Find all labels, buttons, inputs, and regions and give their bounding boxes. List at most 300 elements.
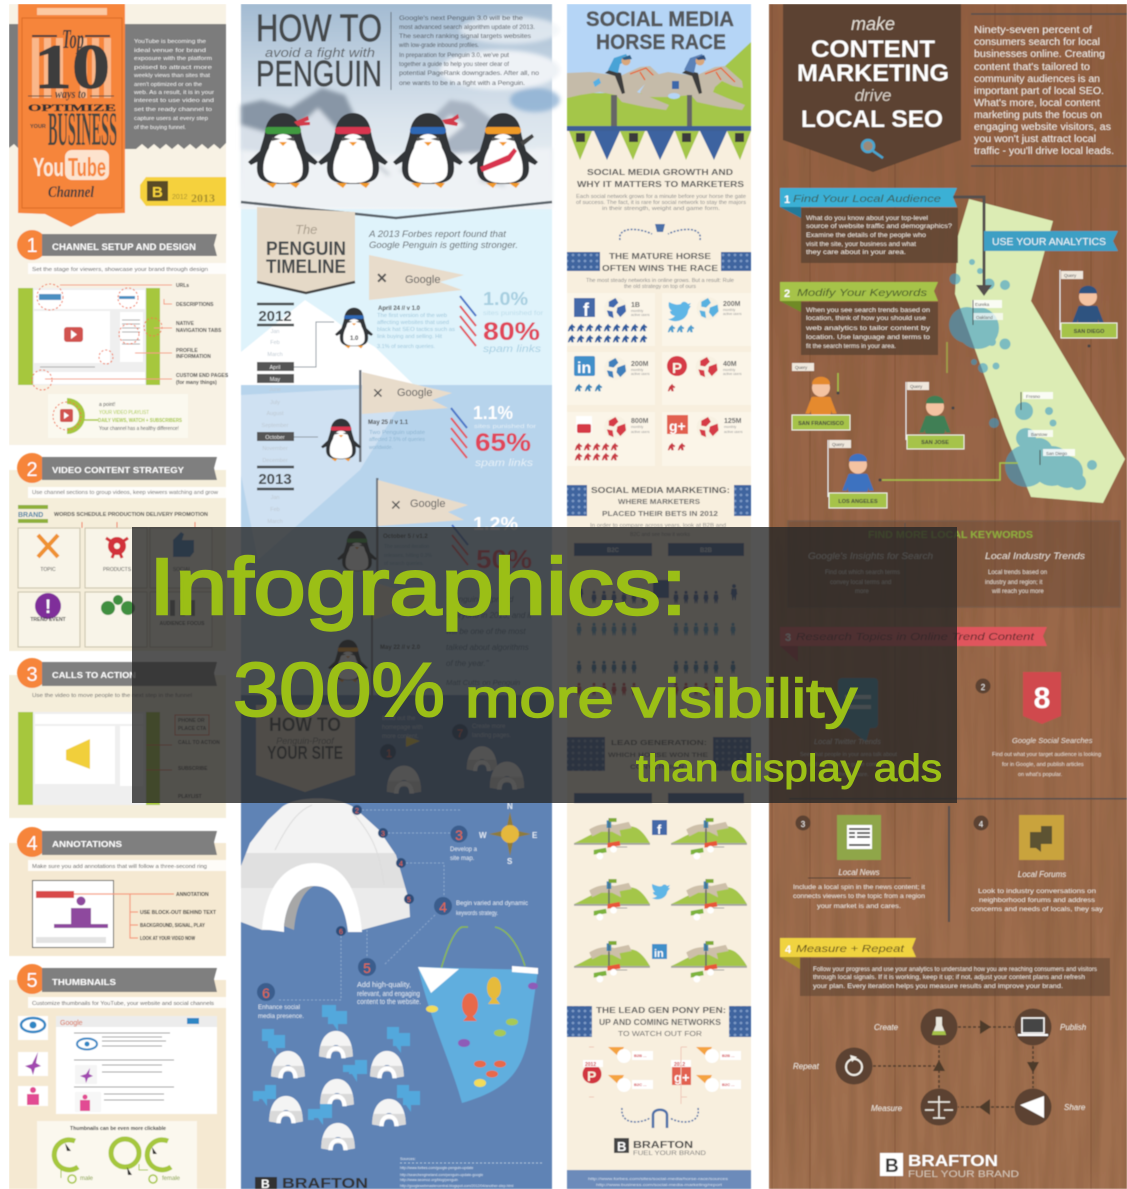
step 6 social igloo network: 6 [262, 985, 270, 1001]
update 4: May 22 v2.0: Matt Cutts on Penguin [446, 678, 520, 687]
orange title banner: ways to [55, 86, 86, 101]
step 4 local forums: Local Forums [1018, 870, 1066, 879]
card: LinkedIn: monthly [631, 368, 644, 372]
step 3 compass: S [507, 857, 513, 866]
wireframe labels: PLACE CTA [178, 726, 207, 732]
intro paragraph: content that's tailored to [974, 62, 1090, 73]
step 3 compass: N [507, 802, 513, 811]
icon: LinkedIn small [652, 944, 667, 960]
header body text: web. As a result, it is in your [133, 90, 214, 96]
orange title banner: OPTIMIZE [28, 103, 116, 113]
source cards: and use topics to guide content [808, 762, 885, 768]
number badge 3: 3 [26, 664, 38, 686]
cycle: share: Share [1064, 1103, 1086, 1112]
wireframe labels: PLAYLIST [178, 794, 202, 800]
how to penguin-proof banner [256, 705, 355, 792]
B2C vs B2B bars and people rows [574, 543, 744, 696]
map labels: San Diego [1046, 451, 1068, 456]
section 1: channel setup: Set the stage for viewers, showcase your brand through design [32, 267, 208, 273]
update 1: April 24 v1.0: sites punished for [483, 311, 543, 317]
source cards: See what people in your area talk about [800, 752, 897, 758]
sources and Brafton logo: http://googlewebmastercentral.blogspot.com/2012/04/another-step.html [400, 1184, 514, 1188]
use your analytics ribbon [984, 231, 1118, 251]
card: Google Plus: 125M [724, 418, 742, 425]
wireframe labels: PHONE OR [178, 718, 205, 724]
large igloo [241, 790, 416, 933]
update 2: May 25 v1.1: Google [397, 387, 432, 399]
icon: Twitter small [652, 884, 670, 899]
number badge 1 [17, 230, 47, 260]
step 3 compass: Develop a [450, 847, 478, 853]
character: Northern Nevada: SAN DIEGO [1074, 329, 1105, 335]
card: Google Plus: g+ [669, 418, 686, 434]
update 1: April 24 v1.0: 1.0 [350, 336, 359, 342]
step 4 keyword bucket [418, 897, 538, 1103]
step 5 quality content: content to the website. [357, 999, 421, 1006]
source cards: on what's popular. [1018, 772, 1063, 778]
step 3 compass [450, 802, 538, 866]
strategy icon cards [18, 528, 212, 647]
timeline years and months [257, 304, 334, 525]
step 4 keyword bucket: keywords strategy. [456, 910, 498, 917]
yellow Brafton tag: 2013 [191, 191, 215, 205]
update 3: October v1.2: ✕ [390, 497, 402, 513]
section 2: video content strategy: BRAND [18, 512, 43, 519]
steps under the overlay: 7 [457, 728, 463, 740]
character: Los Angeles [828, 440, 1018, 508]
timeline wooden banner: The [295, 222, 317, 237]
annotation labels: ANNOTATION [176, 892, 209, 898]
step 2 modify your keywords: location, think of how you should use [806, 315, 926, 322]
update 1: April 24 v1.0: spam links [483, 344, 541, 355]
section 2: video content strategy: WORDS SCHEDULE PRODUCTION DELIVERY PROMOTION [54, 512, 208, 518]
update 2: May 25 v1.1: May 25 // v 1.1 [368, 420, 409, 426]
card: Twitter: monthly [723, 308, 736, 312]
section 3: calls to action [17, 658, 220, 805]
panel: Social media horse race: Each social network grows for a minute before your horse the gate [576, 194, 746, 200]
chevron divider [241, 202, 552, 218]
update 4: May 22 v2.0 [328, 580, 532, 700]
timeline years and months: 2013 [258, 471, 292, 488]
Pinterest and Google+ pens: B2B ... [634, 1053, 646, 1058]
annotation labels: BACKGROUND, SIGNAL, PLAY [140, 923, 206, 929]
step 1 find your local audience: they care about in your area. [806, 249, 906, 256]
dark title banner: make [851, 14, 895, 34]
wireframe labels: INFORMATION [176, 354, 211, 360]
measurement cycle diagram [793, 1008, 1087, 1126]
lead gen pony pen heading: THE LEAD GEN PONY PEN: [596, 1005, 726, 1015]
header body text: aren't optimized or on the [134, 82, 202, 88]
card: YouTube: 800M [631, 418, 649, 425]
step 6 social igloo network [253, 983, 420, 1150]
number badge 2 [976, 678, 990, 694]
update 2: May 25 v1.1: affected 2.5% of queries [369, 437, 426, 443]
update 3: October v1.2: of search queries. [384, 561, 424, 567]
icon: magnifier [862, 140, 883, 158]
Brafton logo: B [885, 1156, 899, 1177]
thumbnail samples [18, 1016, 48, 1106]
Forbes intro line [368, 229, 518, 250]
timeline years and months: March [267, 519, 283, 525]
lead generation heading [567, 737, 751, 803]
timeline years and months: March [267, 352, 283, 358]
header body text [133, 39, 214, 131]
thumbnail tip box: Thumbnails can be even more clickable [70, 1126, 166, 1132]
Pinterest and Google+ pens: P [587, 1068, 596, 1084]
annotation labels [140, 892, 216, 942]
section 4: annotations [17, 827, 226, 948]
thumbnail tip box: female [162, 1176, 181, 1182]
step 4 local forums: Look to industry conversations on [978, 888, 1097, 895]
card: YouTube [575, 416, 650, 460]
timeline years and months: April [269, 365, 281, 371]
cycle arrows [873, 1027, 1033, 1107]
wireframe labels: PROFILE [176, 348, 198, 354]
intro paragraph: Ninety-seven percent of [974, 25, 1092, 36]
update 4: May 22 v2.0: "Penguin surprised [446, 595, 514, 604]
cycle: share [1014, 1088, 1086, 1126]
section 2: video content strategy: Use channel sections to group videos, keep viewers watching and grow [32, 490, 218, 496]
Brafton logo: BRAFTON [633, 1139, 693, 1151]
header body text: ideal venue for brand [134, 48, 206, 54]
orange title banner: Tube [68, 152, 106, 182]
step 2 modify your keywords: location. Use language and terms to [806, 334, 930, 341]
green ring tip: Your channel has a healthy difference! [99, 426, 179, 432]
timeline wooden banner [257, 207, 355, 293]
card: Pinterest: monthly [723, 368, 736, 372]
panel: How to avoid a fight with Penguin [241, 4, 560, 1189]
title: PENGUIN [256, 53, 382, 94]
yellow Brafton tag [140, 177, 226, 206]
dark title banner: MARKETING [797, 60, 949, 87]
step 1 find your local audience: source of website traffic and demographics? [806, 223, 952, 230]
icon: Google Trends: 8 [1034, 682, 1050, 715]
step 3 research trending content: Research Topics in Online Trend Content [796, 631, 1035, 643]
update 1: April 24 v1.0: 1.0% [483, 289, 528, 309]
section heading mature horse: the old strategy on top of ours [624, 284, 697, 290]
wireframe labels [175, 715, 220, 800]
wireframe labels: CUSTOM END PAGES [176, 373, 229, 379]
Pinterest and Google+ pens: 2012 [674, 1062, 685, 1068]
timeline wooden banner: TIMELINE [266, 257, 346, 278]
panel: YouTube channel guide: BUSINESS [48, 103, 117, 156]
section heading where marketers placed bets [567, 485, 751, 538]
step 2 modify your keywords: web analytics to tailor content by [805, 325, 931, 332]
timeline years and months: Feb [270, 340, 280, 346]
ribbon heading: ANNOTATIONS [52, 840, 123, 849]
title: SOCIAL MEDIA [586, 8, 734, 31]
timeline years and months: December [262, 458, 288, 464]
update 1: April 24 v1.0: April 24 // v 1.0 [378, 306, 421, 312]
use your analytics ribbon: USE YOUR ANALYTICS [992, 236, 1106, 248]
orange title banner: YOUR [30, 124, 46, 130]
timeline years and months: August [266, 411, 284, 417]
update 3: October v1.2: October 5 / v1.2 [383, 534, 428, 540]
update 2: May 25 v1.1: ✕ [372, 385, 384, 401]
lead generation heading: WHICH HORSE WON THE [608, 752, 709, 759]
orange title banner: Top [62, 24, 84, 54]
map labels: Eureka [975, 302, 990, 307]
wireframe labels: CALL TO ACTION [178, 740, 220, 746]
header body text: YouTube is becoming the [134, 39, 206, 45]
character: Los Angeles: Query [832, 442, 845, 447]
section 2: video content strategy: TREND EVENT [30, 617, 66, 623]
igloo numbered points [336, 805, 414, 936]
source cards: Google Social Searches [1012, 736, 1093, 745]
Forbes intro line: Google Penguin is getting stronger. [369, 240, 518, 250]
header body text: set the ready channel to [134, 107, 212, 113]
update 1: April 24 v1.0: affecting websites that used [377, 320, 449, 326]
Pinterest and Google+ pens: B2C ... [634, 1082, 646, 1087]
yellow Brafton tag: 2012 [172, 194, 188, 201]
B2C vs B2B bars and people rows: B2C [607, 548, 620, 554]
dark title banner: LOCAL SEO [801, 106, 943, 133]
section 5: thumbnails: Customize thumbnails for YouTube, your website and social channels [32, 1001, 214, 1007]
ribbon heading: CHANNEL SETUP AND DESIGN [52, 242, 196, 252]
timeline years and months: October [265, 435, 285, 441]
bunting [567, 126, 751, 160]
how to penguin-proof banner: HOW TO [269, 715, 341, 736]
update 1: April 24 v1.0: 80% [483, 318, 540, 346]
step 5 quality content: Add high-quality, [357, 982, 411, 989]
number badge 1: 1 [26, 235, 38, 257]
orange title banner [18, 4, 125, 227]
icon: green leaves [101, 595, 135, 615]
step 3 local news: connects viewers to the topic from a region [793, 894, 925, 900]
step 3 compass: E [532, 831, 538, 840]
header body text: of the buying funnel. [134, 125, 186, 131]
character: Los Angeles: LOS ANGELES [838, 499, 878, 505]
find more local keywords box: Local Industry Trends [985, 551, 1086, 561]
step 3 local news: Include a local spin in the news content; it [793, 885, 925, 891]
map labels: Oakland [976, 315, 993, 320]
timeline wooden banner: PENGUIN [266, 239, 346, 260]
sources and Brafton logo: http://www.seomoz.org/blog/penguin [400, 1178, 458, 1182]
igloo numbered points: 2 [355, 808, 359, 815]
update 1: April 24 v1.0: The first version of the web [377, 313, 447, 319]
cycle: repeat [793, 1048, 872, 1084]
cycle: publish [1014, 1008, 1087, 1046]
update 4: May 22 v2.0: talked about algorithms [446, 643, 529, 652]
title [586, 8, 734, 54]
dark translucent headline overlay [132, 527, 957, 803]
Forbes intro line: A 2013 Forbes report found that [368, 229, 507, 239]
header body text: exposure with the platform [134, 56, 212, 62]
lead gen pony pen heading: TO WATCH OUT FOR [618, 1029, 703, 1038]
section 2: video content strategy: PRODUCTS [103, 567, 132, 573]
intro text: In preparation for Penguin 3.0, we've put [399, 52, 509, 59]
map labels: Fresno [1026, 394, 1041, 399]
card: Twitter: active users [723, 312, 742, 316]
step 4 local forums: 4 [979, 820, 984, 829]
card: YouTube: monthly [631, 425, 644, 429]
step 4 local forums: concerns and needs of locals, they say [971, 906, 1104, 913]
intro paragraph: you won't just attract local [974, 134, 1096, 145]
intro text: The search ranking signal targets websites [399, 33, 532, 40]
number badge 5 [17, 964, 47, 994]
icon: red gear [106, 537, 128, 558]
Pinterest and Google+ pens: B2C ... [722, 1082, 734, 1087]
wireframe labels: URLs [176, 283, 189, 289]
update 1: April 24 v1.0: link buying and selling. Hit [377, 334, 443, 340]
how to penguin-proof banner: YOUR SITE [267, 743, 343, 763]
thumbnail tip box [37, 1121, 197, 1189]
sources and Brafton logo: http://www.forbes.com/google-penguin-update [400, 1166, 473, 1170]
card: Facebook: f [583, 300, 590, 320]
step 1 find your local audience: Examine the details of the people who [806, 232, 926, 239]
intro paragraph: What's more, local content [974, 98, 1100, 109]
Brafton logo: B [617, 1139, 626, 1154]
section 1: channel setup [17, 230, 229, 438]
step 6 social igloo network: Enhance social [258, 1005, 300, 1011]
steps under the overlay: Create more [472, 724, 506, 730]
update 2: May 25 v1.1: sites punished for [474, 424, 537, 430]
fish [426, 977, 538, 1087]
ribbon heading [42, 234, 217, 256]
update 3: October v1.2 [337, 478, 532, 574]
header body text: poised to attract more [134, 65, 212, 71]
find more local keywords box [788, 521, 1120, 607]
step 3 compass: site map. [450, 856, 475, 862]
find more local keywords box: will reach you more [991, 589, 1044, 595]
intro paragraph: engaging website visitors, as [974, 122, 1111, 133]
section heading growth [577, 167, 744, 189]
green ring tip: a point! [99, 402, 115, 408]
intro text: with low-grade inbound profiles. [398, 42, 479, 49]
update 1: April 24 v1.0: 3.1% of search queries. [377, 344, 435, 350]
sources and Brafton logo [255, 1156, 542, 1189]
Pinterest and Google+ pens [582, 1047, 741, 1104]
update 4: May 22 v2.0: May 22 // v 2.0 [380, 645, 421, 651]
timeline years and months: November [262, 446, 288, 452]
cycle: repeat: Repeat [793, 1062, 820, 1071]
icon: Facebook small [652, 820, 667, 837]
step 3 compass: W [479, 831, 487, 840]
browser search result mock-up [56, 1016, 217, 1114]
step 3 research trending content: 3 [785, 632, 791, 644]
timeline years and months: 2012 [258, 308, 292, 325]
source cards: for in Google, and publish articles [1002, 762, 1084, 768]
icon: audience [170, 600, 195, 616]
intro paragraph: community audiences is an [974, 74, 1100, 85]
title: HOW TO [256, 8, 382, 50]
headline: than display ads: than display ads [636, 748, 942, 790]
find more local keywords box: more [855, 589, 869, 595]
step 1 find your local audience [780, 188, 958, 263]
update 4: May 22 v2.0: everyone in 2013, and it [446, 611, 532, 620]
race scene rows [574, 818, 747, 983]
orange title banner: You [33, 152, 64, 182]
steps under the overlay: more content. [382, 734, 419, 740]
update 3: October v1.2: The second iteration [384, 544, 430, 550]
intro text: one wants to be in a fight with a Penguin. [399, 80, 525, 87]
title: avoid a fight with [265, 46, 375, 60]
wireframe with megaphone [18, 712, 172, 805]
intro text: Google's next Penguin 3.0 will be the [399, 15, 523, 22]
update 2: May 25 v1.1: spam links [475, 458, 533, 469]
section heading where marketers placed bets: SOCIAL MEDIA MARKETING: [591, 485, 730, 495]
dark title banner [783, 4, 961, 172]
green ring tip: YOUR VIDEO PLAYLIST [99, 410, 149, 416]
ribbon heading [42, 662, 217, 686]
character: Sacramento: SAN JOSE [921, 440, 949, 446]
video frame with annotation [32, 880, 174, 948]
igloo numbered points: 3 [381, 831, 385, 838]
title: HORSE RACE [596, 31, 726, 54]
wireframe labels: SUBSCRIBE [178, 766, 208, 772]
header body text: weekly views than sites that [133, 73, 210, 79]
step 3 compass: 3 [455, 827, 463, 843]
step 4 keyword bucket: 4 [439, 899, 447, 915]
card: Pinterest: 40M [723, 361, 737, 368]
step 1 find your local audience: 1 [784, 194, 790, 206]
browser search result mock-up: Google [60, 1020, 83, 1027]
icon: LinkedIn small: in [654, 948, 664, 960]
update 2: May 25 v1.1 [321, 370, 537, 469]
panel: Content marketing drives local SEO [769, 4, 1127, 1189]
step 2 modify your keywords: 2 [784, 288, 790, 300]
California map [949, 197, 1125, 503]
sources and Brafton logo: http://searchengineland.com/penguin-update-google [400, 1173, 483, 1177]
source cards: Find out what your target audience is looking [992, 752, 1101, 758]
character: Northern Nevada: Query [1064, 273, 1077, 278]
grey header band [9, 24, 226, 149]
Pinterest and Google+ pens: 2012 [585, 1062, 596, 1068]
timeline years and months: May [270, 377, 280, 383]
ornament [622, 1108, 698, 1128]
update 3: October v1.2: releases, hitting 0.3% [384, 553, 432, 559]
number badge 5: 5 [26, 970, 38, 992]
number badge 2 [17, 453, 47, 483]
card: Facebook [568, 297, 650, 342]
step 5 quality content: relevant, and engaging [357, 991, 420, 998]
map labels: Barstow [1031, 432, 1048, 437]
headline: 300% more visibility: 300% [233, 648, 445, 733]
intro text: together a guide to help you steer clear of [399, 61, 509, 68]
step 2 modify your keywords [780, 282, 938, 355]
footer band: http://www.business.com/social-media-marketing/report [596, 1183, 722, 1187]
igloo numbered points: 5 [407, 897, 411, 904]
section 5: thumbnails [17, 964, 226, 1189]
step 1 find your local audience: visit the site, your business and what [806, 241, 916, 248]
ornament [620, 229, 700, 240]
update 2: May 25 v1.1: worldwide. [369, 445, 393, 451]
find more local keywords box: Find out which search terms [825, 570, 900, 576]
horse two with jockey [640, 54, 745, 126]
character: San Francisco: SAN FRANCISCO [798, 421, 845, 427]
snowy mountain photo header [241, 4, 560, 209]
cycle: create: Create [874, 1023, 899, 1032]
headline: 300% more visibility [233, 648, 858, 733]
step 6 social igloo network: media presence. [258, 1014, 304, 1020]
card: Pinterest [667, 356, 742, 391]
Brafton logo: FUEL YOUR BRAND [908, 1169, 1019, 1180]
icon: exclamation [35, 593, 61, 619]
intro text: most advanced search algorithm update of 2013. [399, 24, 535, 31]
icon: Facebook small: f [657, 822, 662, 837]
timeline years and months: Jan [271, 495, 279, 501]
update 1: April 24 v1.0 [335, 255, 543, 355]
sky and hill scene [567, 4, 751, 126]
network cards [567, 293, 751, 466]
find more local keywords box: Google's Insights for Search [808, 551, 933, 561]
header body text: interest to use video and [134, 98, 214, 104]
steps under the overlay [380, 716, 524, 794]
dark title banner: drive [855, 86, 891, 105]
step 2 modify your keywords: When you see search trends based on [806, 307, 930, 314]
lead generation heading: CONVERSION [630, 764, 684, 771]
find more local keywords box: industry and region; it [985, 580, 1043, 586]
